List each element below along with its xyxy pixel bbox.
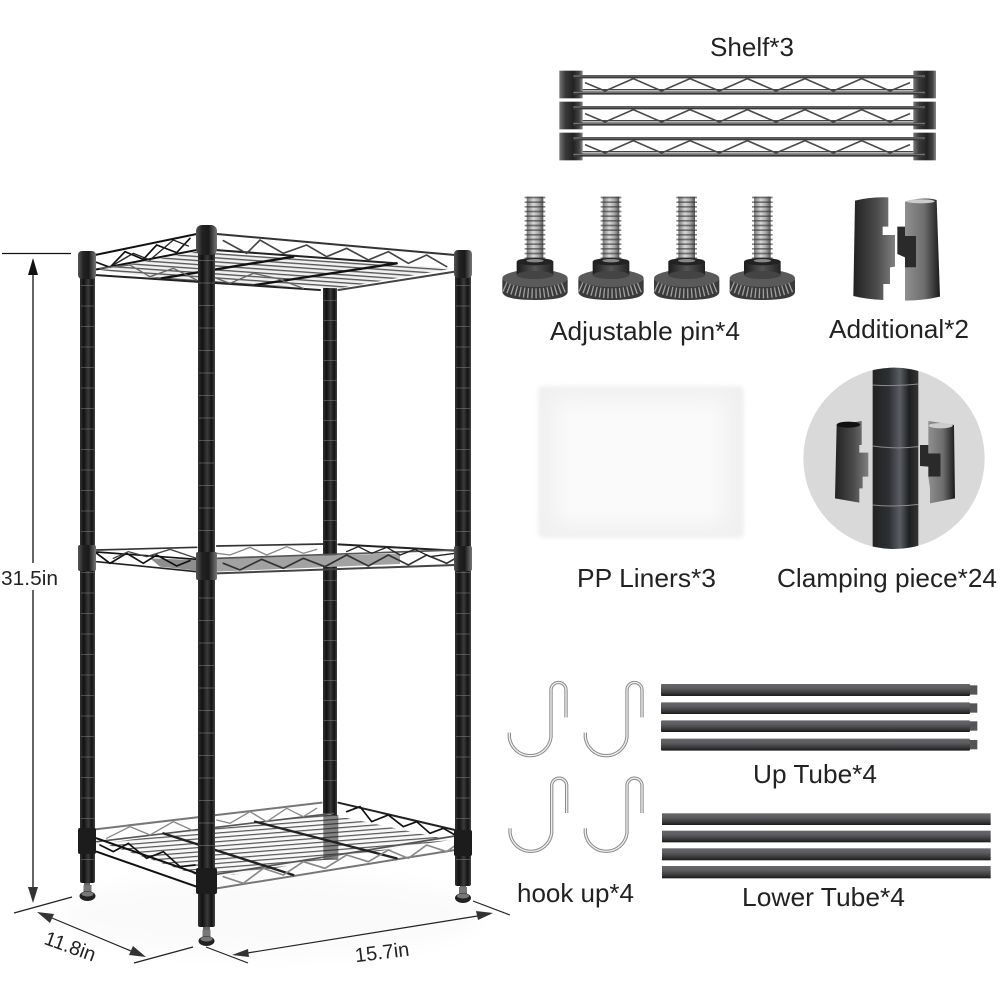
adjustable pins <box>502 197 795 300</box>
right post <box>454 250 472 903</box>
dimension: height: 31.5in <box>1 568 58 590</box>
additional clip halves <box>853 197 940 301</box>
dimension: width: 15.7in <box>354 939 411 967</box>
front post <box>196 225 217 946</box>
up tubes <box>661 684 977 751</box>
back post <box>322 277 338 847</box>
PP liner sheet <box>538 386 744 538</box>
clamping piece circle <box>803 367 985 550</box>
bottom shelf <box>95 803 458 888</box>
hooks <box>509 682 642 851</box>
dimension: width <box>206 901 510 967</box>
left post <box>78 251 96 901</box>
label: clamping piece: Clamping piece*24 <box>777 563 997 593</box>
dimension: depth <box>14 897 193 966</box>
label: additional: Additional*2 <box>829 314 969 344</box>
label: PP liners: PP Liners*3 <box>577 563 716 593</box>
shelf panels <box>559 71 936 160</box>
dimension: height <box>1 254 71 903</box>
dimension: depth: 11.8in <box>41 928 99 966</box>
middle shelf <box>97 544 458 573</box>
label: hook up: hook up*4 <box>517 878 634 908</box>
floor shadow <box>60 875 480 955</box>
label: adjustable pin: Adjustable pin*4 <box>550 316 740 346</box>
label: lower tube: Lower Tube*4 <box>742 882 905 912</box>
label: shelf: Shelf*3 <box>710 34 794 62</box>
top shelf <box>90 234 455 290</box>
label: up tube: Up Tube*4 <box>753 759 877 789</box>
lower tubes <box>662 813 991 878</box>
shelving rack <box>78 225 472 946</box>
